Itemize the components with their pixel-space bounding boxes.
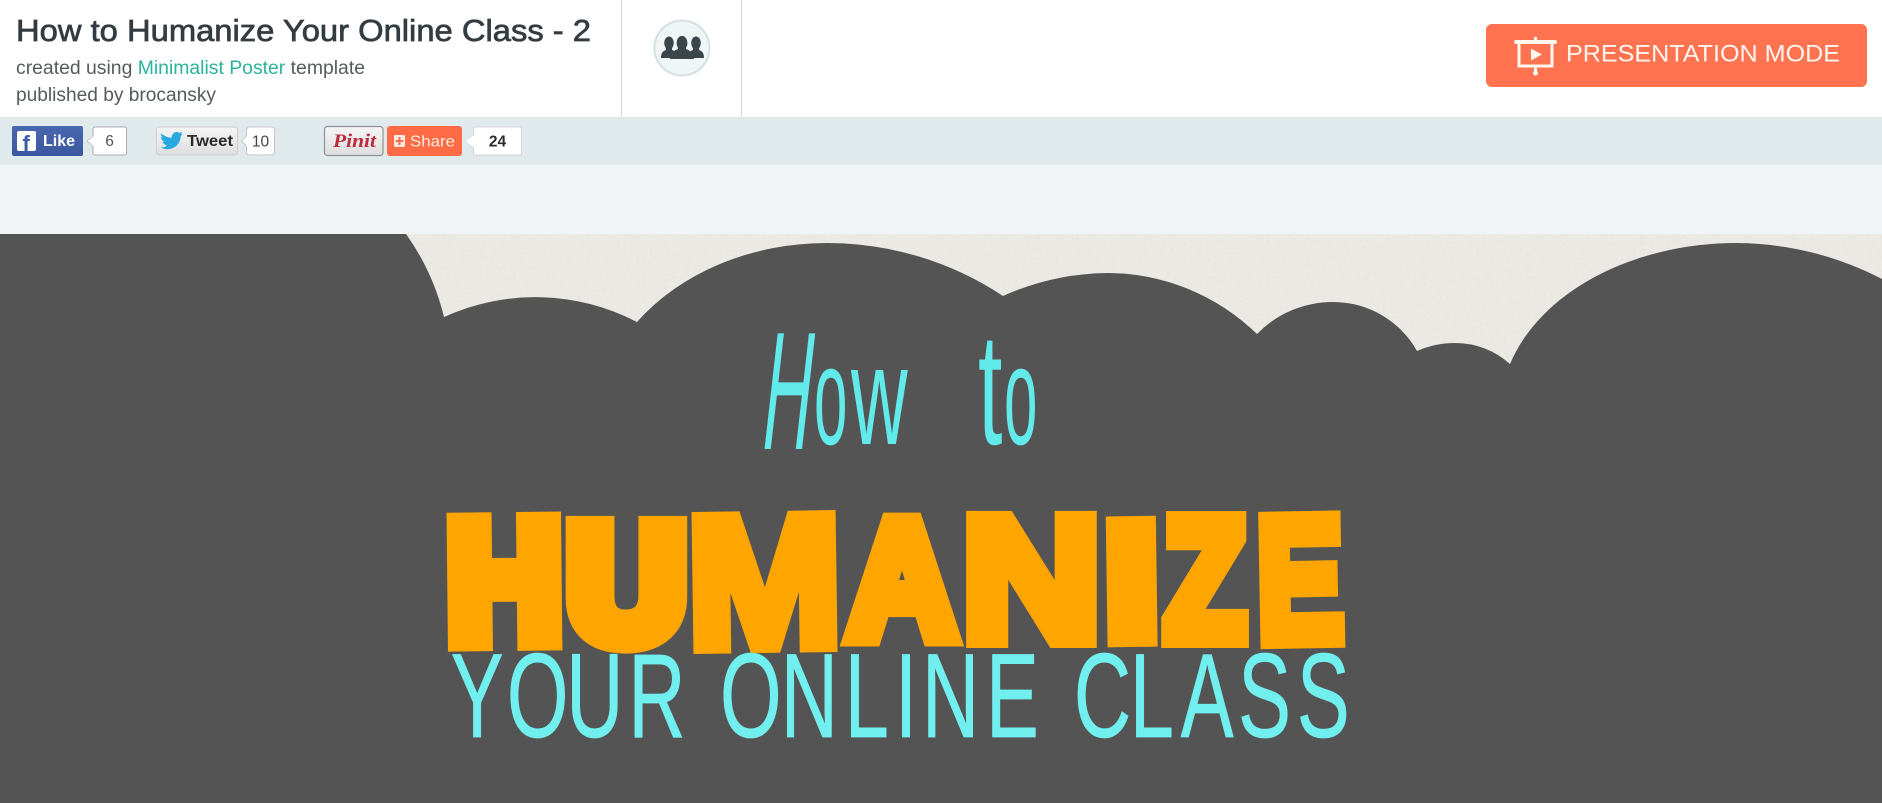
pin it button xyxy=(324,126,383,156)
heading: How to: t xyxy=(978,300,1002,479)
icon: twitter bird xyxy=(161,132,183,149)
heading: HUMANIZE: M xyxy=(686,478,843,687)
heading: HUMANIZE xyxy=(447,478,1345,687)
heading: How to xyxy=(755,299,1037,486)
heading: How to: o xyxy=(814,317,847,474)
facebook like button xyxy=(12,126,83,156)
heading: HUMANIZE: Z xyxy=(1165,485,1245,675)
page title: How to Humanize Your Online Class - 2 xyxy=(16,13,591,48)
pale gap strip xyxy=(0,165,1882,234)
facebook count: 6 xyxy=(105,133,114,150)
poster xyxy=(0,234,1882,803)
template credit: created using Minimalist Poster template xyxy=(16,58,365,79)
heading: HUMANIZE: U xyxy=(569,494,684,673)
dark cloud shape xyxy=(0,234,1882,803)
share count xyxy=(466,127,522,155)
share button xyxy=(387,126,462,156)
social sharing bar xyxy=(0,117,1882,165)
heading: HUMANIZE: H xyxy=(447,488,562,676)
facebook count xyxy=(87,127,126,155)
share button: Share xyxy=(410,134,455,150)
leather paper background xyxy=(0,234,1882,803)
presentation mode button: PRESENTATION MODE xyxy=(1566,40,1840,68)
heading: How to: w xyxy=(850,318,908,475)
publisher credit: published by brocansky xyxy=(16,85,216,106)
heading: HUMANIZE: A xyxy=(848,487,956,673)
tweet count xyxy=(242,127,274,155)
heading: HUMANIZE: E xyxy=(1255,482,1345,679)
heading: How to: o xyxy=(1004,317,1037,474)
tweet button: Tweet xyxy=(187,133,233,150)
icon: group of people xyxy=(654,20,710,76)
presentation mode button xyxy=(1486,24,1867,87)
share count: 24 xyxy=(489,134,506,150)
header bar xyxy=(0,0,1882,117)
heading: HUMANIZE: N xyxy=(962,482,1101,678)
icon: projector screen xyxy=(1516,37,1555,76)
heading: How to: H xyxy=(755,299,825,486)
heading: HUMANIZE: I xyxy=(1101,489,1162,675)
heading: YOUR ONLINE CLASS: YOUR ONLINE CLASS xyxy=(451,628,1350,763)
pin it button: Pinit xyxy=(332,131,377,152)
tweet count: 10 xyxy=(252,134,269,150)
facebook like button: Like xyxy=(43,133,75,150)
tweet button xyxy=(156,127,238,155)
facebook like button: f xyxy=(22,131,30,156)
